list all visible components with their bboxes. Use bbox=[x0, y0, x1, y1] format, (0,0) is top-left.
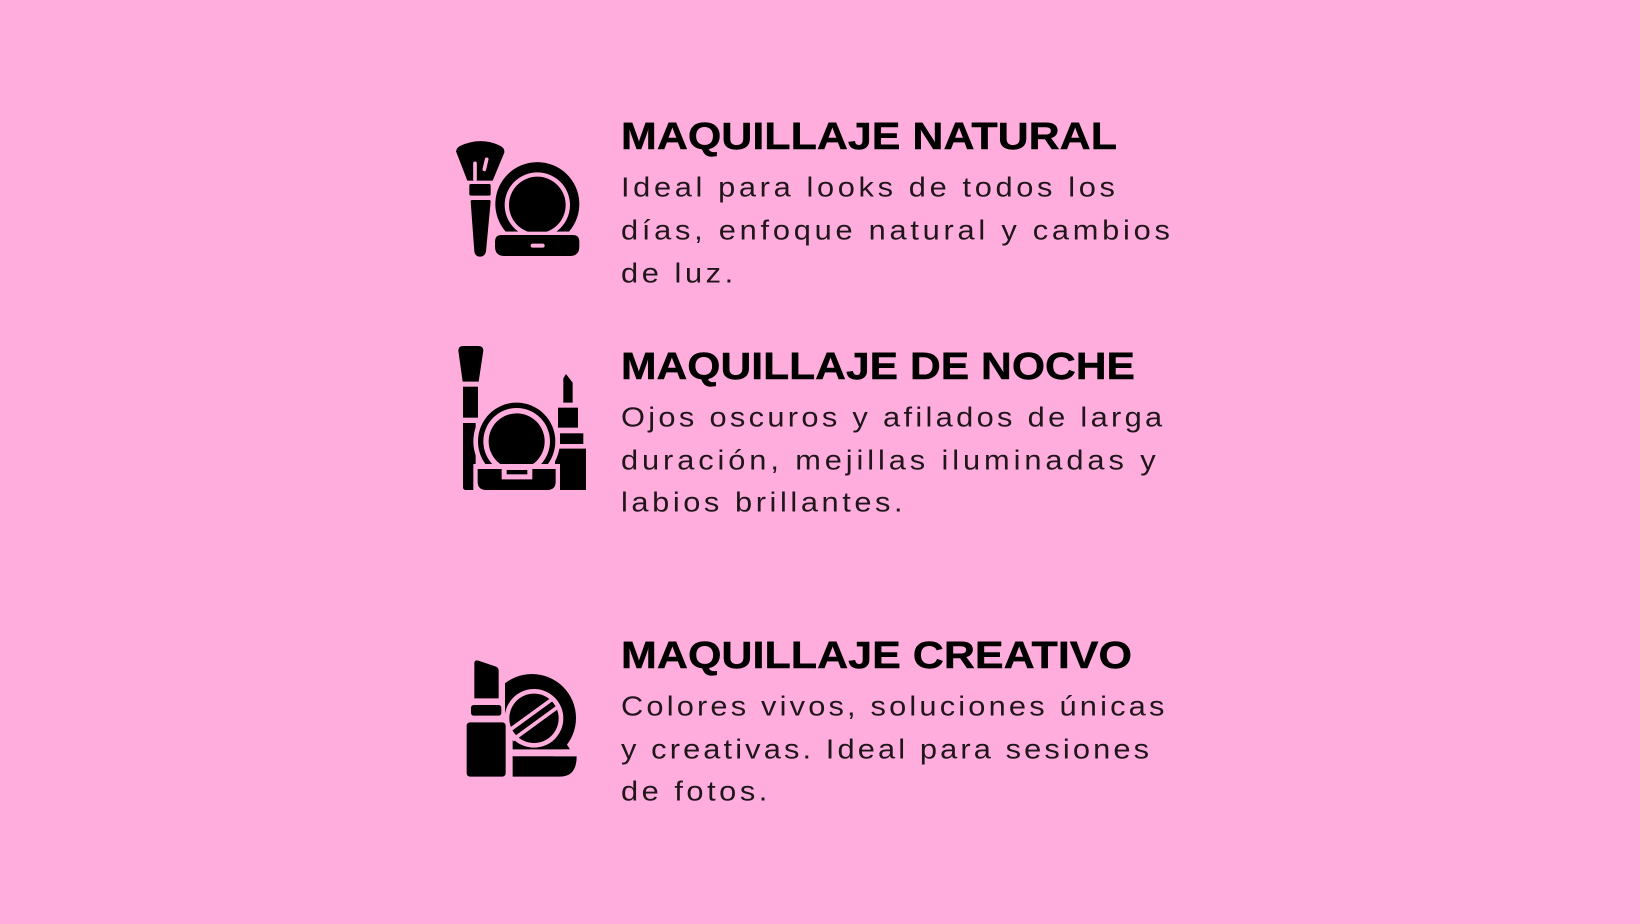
text block: maquillaje creativo: y creativas. Ideal para sesiones bbox=[621, 734, 1149, 765]
text block: maquillaje de noche: Ojos oscuros y afilados de larga bbox=[621, 402, 1163, 433]
text block: maquillaje de noche bbox=[621, 402, 1163, 518]
text block: maquillaje natural: días, enfoque natural y cambios bbox=[621, 215, 1170, 246]
text block: maquillaje creativo: Colores vivos, soluciones únicas bbox=[621, 691, 1164, 722]
heading: maquillaje de noche: MAQUILLAJE DE NOCHE bbox=[621, 346, 1135, 388]
panel: maquillaje creativo bbox=[467, 635, 1164, 807]
text block: maquillaje creativo: de fotos. bbox=[621, 776, 767, 807]
text block: maquillaje de noche: labios brillantes. bbox=[621, 487, 903, 518]
heading: maquillaje natural: MAQUILLAJE NATURAL bbox=[621, 116, 1117, 158]
panel: maquillaje de noche bbox=[458, 346, 1163, 518]
icon: lipstick and compact bbox=[467, 660, 580, 777]
text block: maquillaje creativo bbox=[621, 691, 1164, 807]
icon: brush, compact and lipstick bbox=[458, 346, 586, 490]
icon: brush and compact bbox=[456, 141, 579, 257]
text block: maquillaje natural: Ideal para looks de todos los bbox=[621, 172, 1115, 203]
text block: maquillaje de noche: duración, mejillas iluminadas y bbox=[621, 445, 1156, 476]
heading: maquillaje creativo: MAQUILLAJE CREATIVO bbox=[621, 635, 1132, 677]
panel: maquillaje natural bbox=[456, 116, 1170, 289]
text block: maquillaje natural bbox=[621, 172, 1170, 289]
text block: maquillaje natural: de luz. bbox=[621, 258, 733, 289]
